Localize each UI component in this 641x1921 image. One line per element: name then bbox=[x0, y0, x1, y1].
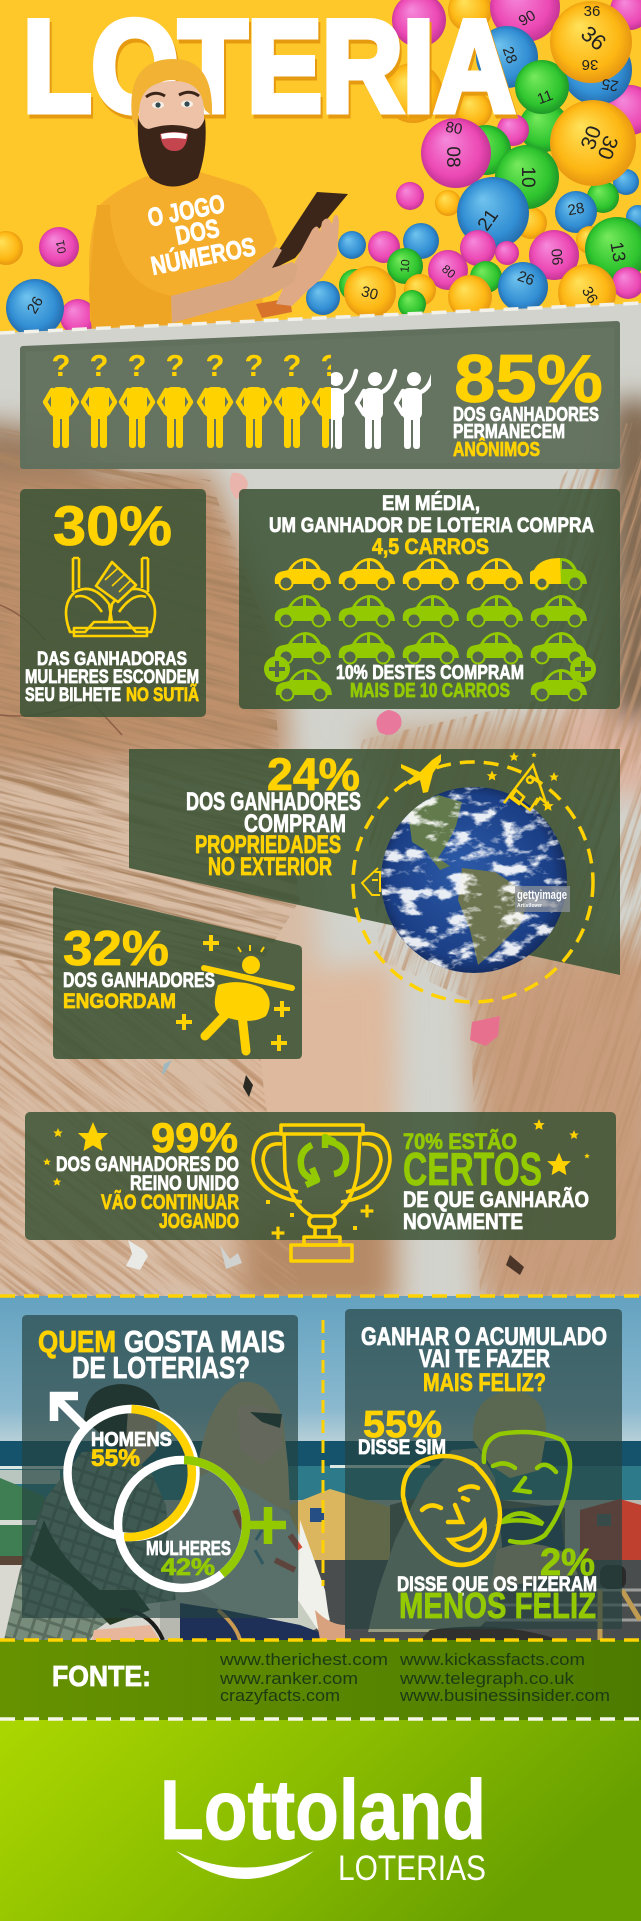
panel: will jackpot make you happier: DISSE SIM bbox=[358, 1436, 446, 1459]
panel: sources: www.kickassfacts.com bbox=[399, 1650, 585, 1669]
panel: 24% properties abroad bbox=[129, 749, 620, 1002]
icon: house left bbox=[362, 868, 380, 895]
panel: 99% / 70% trophy bbox=[25, 1112, 616, 1261]
lottery balls behind title: 28 bbox=[566, 200, 586, 219]
icon: overweight figure bbox=[176, 935, 292, 1051]
man on right bbox=[368, 1391, 640, 1640]
woman on bike bbox=[165, 1382, 345, 1640]
panel: 30% bra: 30% bbox=[53, 494, 172, 557]
panel: 30% bra: DAS GANHADORAS bbox=[37, 649, 187, 670]
panel: 30% bra: MULHERES ESCONDEM bbox=[25, 667, 199, 688]
man in plaid shirt bbox=[4, 1384, 176, 1640]
title shadow and title: LOTERIA bbox=[25, 0, 517, 143]
panel: sources: www.businessinsider.com bbox=[399, 1686, 610, 1705]
footer: lottoland logo: LOTERIAS bbox=[338, 1849, 486, 1888]
panel: 99% / 70% trophy: DOS GANHADORES DO bbox=[56, 1153, 239, 1176]
panel: will jackpot make you happier: MENOS FELIZ bbox=[399, 1585, 596, 1626]
panel: 99% / 70% trophy: VÃO CONTINUAR bbox=[101, 1191, 239, 1214]
background: beach photo bbox=[0, 1296, 641, 1640]
lottery balls behind title: 36 bbox=[584, 3, 600, 20]
venn rings male female bbox=[50, 1392, 286, 1588]
lottery balls behind title: 25 bbox=[600, 75, 620, 94]
icons: car grid bbox=[264, 558, 596, 700]
panel: 99% / 70% trophy: REINO UNIDO bbox=[130, 1172, 239, 1195]
panel: will jackpot make you happier: 2% bbox=[540, 1542, 595, 1584]
shirt text bbox=[148, 194, 256, 276]
panel: 99% / 70% trophy: 99% bbox=[151, 1114, 238, 1161]
panel: 85% anonymous bbox=[23, 324, 617, 466]
panel: 24% properties abroad: 24% bbox=[267, 749, 360, 800]
icon: sad mask bbox=[484, 1432, 570, 1543]
panel: will jackpot make you happier: 55% bbox=[363, 1404, 442, 1446]
lottery balls behind title: 30 bbox=[593, 133, 622, 162]
stars bbox=[487, 752, 559, 811]
panel: 30% bra bbox=[20, 489, 206, 717]
panel: 99% / 70% trophy: 70% ESTÃO bbox=[403, 1129, 517, 1154]
panel: who likes lotteries more: MULHERES bbox=[146, 1538, 231, 1560]
lottery balls behind title: 90 bbox=[516, 7, 539, 30]
panel: sources: www.therichest.com bbox=[219, 1650, 388, 1669]
panel: will jackpot make you happier: VAI TE FAZER bbox=[419, 1345, 550, 1373]
lottery balls behind title: 30 bbox=[577, 123, 606, 153]
icon: house top right bbox=[504, 765, 546, 810]
lottery balls behind title: 26 bbox=[24, 294, 47, 317]
lottery balls behind title: 30 bbox=[359, 283, 380, 304]
85% statistic: PERMANECEM bbox=[453, 421, 565, 443]
panel: sources bbox=[0, 1640, 641, 1720]
dashed divider bbox=[322, 1320, 324, 1586]
panel: 24% properties abroad: COMPRAM bbox=[244, 810, 346, 838]
panel: 24% properties abroad: DOS GANHADORES bbox=[186, 788, 361, 816]
footer: lottoland logo: Lottoland bbox=[160, 1763, 486, 1857]
panel: who likes lotteries more: 42% bbox=[161, 1554, 215, 1581]
lottery balls behind title bbox=[0, 0, 641, 337]
panel: cars: EM MÉDIA, bbox=[382, 492, 480, 515]
icon: dashed orbit bbox=[353, 762, 593, 1002]
lottery balls behind title: 36 bbox=[582, 56, 598, 73]
85% statistic: 85% bbox=[454, 341, 603, 417]
lottery balls behind title: 80 bbox=[444, 119, 464, 138]
panel: who likes lotteries more: QUEM bbox=[38, 1324, 116, 1359]
panel: 32% gain weight bbox=[53, 887, 302, 1059]
background: hair photo section bbox=[0, 303, 641, 1296]
shirt text: DOS bbox=[173, 213, 222, 251]
panel: cars: 4,5 CARROS bbox=[372, 534, 489, 559]
lottery balls behind title: 11 bbox=[535, 87, 555, 108]
85% statistic: ANÔNIMOS bbox=[453, 437, 540, 461]
icon: trophy bbox=[253, 1125, 390, 1261]
panel: 99% / 70% trophy: JOGANDO bbox=[159, 1210, 239, 1233]
lottery balls behind title: 28 bbox=[499, 44, 520, 66]
lottery balls behind title: 80 bbox=[439, 262, 459, 281]
panel: who likes lotteries more: 55% bbox=[91, 1445, 140, 1472]
85% statistic: DOS GANHADORES bbox=[453, 404, 599, 426]
panel: 32% gain weight: ENGORDAM bbox=[63, 990, 176, 1013]
shirt text: O JOGO bbox=[145, 188, 227, 233]
panel: 24% properties abroad: NO EXTERIOR bbox=[208, 853, 332, 881]
panel: 30% bra: NO SUTIÃ bbox=[126, 684, 199, 706]
panel: sources: FONTE: bbox=[52, 1661, 151, 1693]
panel: 24% properties abroad: PROPRIEDADES bbox=[195, 831, 341, 859]
panel: 30% bra: SEU BILHETE bbox=[25, 685, 121, 706]
panel: 32% gain weight: DOS GANHADORES bbox=[63, 969, 215, 992]
panel: 99% / 70% trophy: DE QUE GANHARÃO bbox=[403, 1187, 589, 1212]
footer: lottoland logo bbox=[0, 1719, 641, 1921]
shirt text: NÚMEROS bbox=[148, 231, 258, 281]
panel: 32% gain weight: 32% bbox=[63, 922, 169, 976]
panel: sources: crazyfacts.com bbox=[220, 1686, 340, 1705]
man with tablet bbox=[89, 59, 348, 335]
icon: earth globe: gettyimage bbox=[517, 887, 567, 902]
icon: airplane bbox=[401, 754, 441, 793]
panel: cars: 10% DESTES COMPRAM bbox=[336, 662, 524, 684]
icon: refresh arrows bbox=[301, 1137, 346, 1185]
panel: sources: www.telegraph.co.uk bbox=[399, 1669, 575, 1688]
icon: earth globe bbox=[381, 787, 570, 973]
dashed line: beach top bbox=[0, 1294, 641, 1298]
lottery balls behind title: 13 bbox=[606, 240, 630, 263]
panel: sources: www.ranker.com bbox=[219, 1669, 358, 1688]
stars right bbox=[533, 1119, 590, 1175]
icons: public winners bbox=[331, 368, 431, 449]
icon: bra with ticket bbox=[66, 558, 155, 636]
beach huts bbox=[0, 1478, 641, 1570]
85% statistic bbox=[453, 341, 603, 461]
stars left bbox=[43, 1122, 108, 1186]
panel: who likes lotteries more: DE LOTERIAS? bbox=[72, 1350, 250, 1385]
header: yellow background bbox=[0, 0, 641, 340]
lottery balls behind title: 06 bbox=[547, 248, 566, 266]
panel: cars: MAIS DE 10 CARROS bbox=[350, 680, 510, 702]
icon: earth globe: Artistlover bbox=[517, 903, 542, 909]
panel: will jackpot make you happier: DISSE QUE OS FIZERAM bbox=[397, 1573, 597, 1596]
panel: who likes lotteries more bbox=[22, 1315, 298, 1618]
lottery balls behind title: 26 bbox=[515, 268, 537, 289]
lottery balls behind title: 36 bbox=[578, 284, 601, 307]
title shadow and title bbox=[28, 16, 518, 120]
lottery balls behind title: 10 bbox=[397, 258, 413, 273]
panel: who likes lotteries more: HOMENS bbox=[91, 1429, 172, 1451]
confetti around trophy bbox=[266, 1200, 373, 1239]
panel: cars bbox=[239, 489, 620, 709]
lottery balls behind title: 01 bbox=[53, 239, 69, 255]
lottery balls behind title: 10 bbox=[517, 166, 538, 188]
lottery balls behind title: 36 bbox=[576, 21, 611, 56]
panel: will jackpot make you happier bbox=[345, 1309, 622, 1629]
lottery balls behind title: 21 bbox=[474, 206, 503, 235]
icon: happy mask bbox=[403, 1456, 500, 1565]
panel: will jackpot make you happier: MAIS FELIZ? bbox=[423, 1369, 546, 1397]
lottery balls behind title: 08 bbox=[442, 146, 463, 168]
panel: 99% / 70% trophy: CERTOS bbox=[403, 1143, 542, 1195]
dashed line: beach bottom bbox=[0, 1638, 641, 1642]
panel: who likes lotteries more: GOSTA MAIS bbox=[124, 1324, 285, 1359]
icons: anonymous winners bbox=[42, 354, 331, 448]
panel: 99% / 70% trophy: NOVAMENTE bbox=[403, 1209, 523, 1234]
